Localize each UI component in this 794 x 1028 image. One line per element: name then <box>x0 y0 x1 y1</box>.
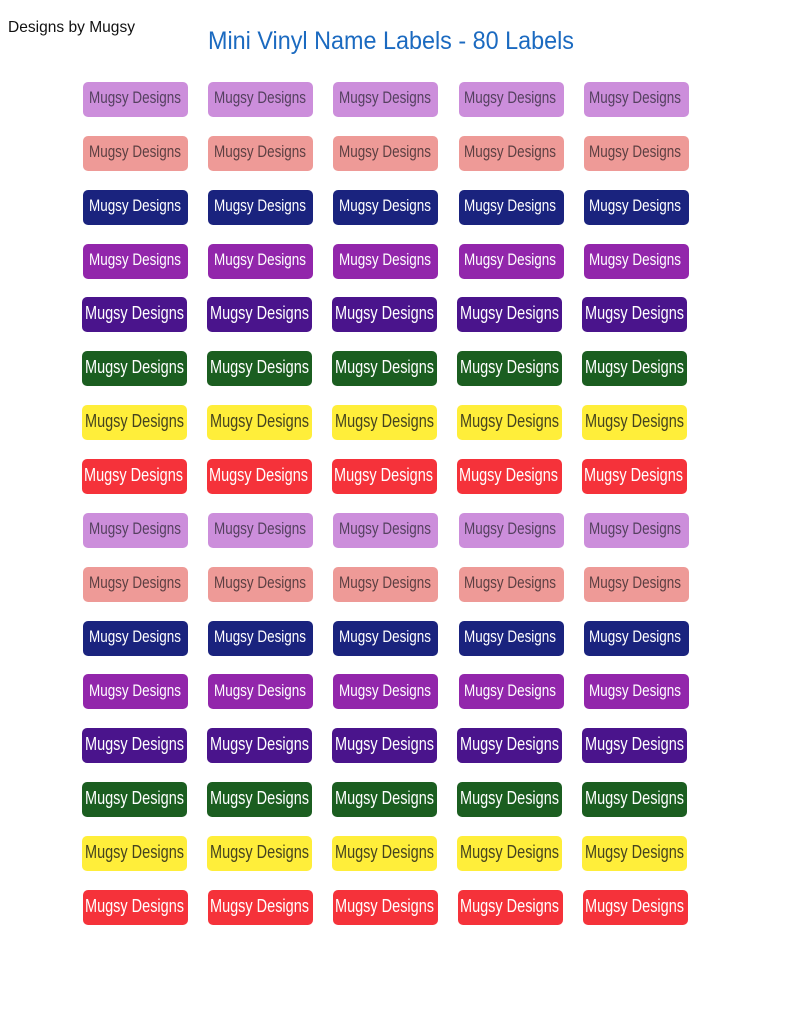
row 12: purple labels: Mugsy Designs <box>339 681 431 700</box>
row 5: indigo labels: Mugsy Designs <box>585 303 684 323</box>
row 12: purple labels: Mugsy Designs <box>464 681 556 700</box>
row 1: lavender labels: Mugsy Designs <box>89 88 181 107</box>
row 5: indigo labels <box>82 297 687 332</box>
row 15: yellow labels: Mugsy Designs <box>585 842 684 862</box>
row 8: red labels: Mugsy Designs <box>334 465 433 485</box>
row 15: yellow labels: Mugsy Designs <box>85 842 184 862</box>
row 14: green labels: Mugsy Designs <box>585 788 684 808</box>
row 7: yellow labels: Mugsy Designs <box>85 411 184 431</box>
row 2: pink labels <box>83 136 689 171</box>
row 9: lavender labels: Mugsy Designs <box>214 519 306 538</box>
row 15: yellow labels: Mugsy Designs <box>335 842 434 862</box>
label grid <box>82 82 689 925</box>
row 3: navy labels: Mugsy Designs <box>214 196 306 215</box>
row 9: lavender labels: Mugsy Designs <box>464 519 556 538</box>
row 6: green labels: Mugsy Designs <box>210 357 309 377</box>
row 16: red labels <box>83 890 688 925</box>
row 15: yellow labels: Mugsy Designs <box>460 842 559 862</box>
row 4: purple labels: Mugsy Designs <box>339 250 431 269</box>
row 11: navy labels: Mugsy Designs <box>464 627 556 646</box>
row 7: yellow labels: Mugsy Designs <box>210 411 309 431</box>
row 6: green labels: Mugsy Designs <box>460 357 559 377</box>
row 6: green labels: Mugsy Designs <box>85 357 184 377</box>
row 2: pink labels: Mugsy Designs <box>214 142 306 161</box>
row 4: purple labels: Mugsy Designs <box>589 250 681 269</box>
row 10: pink labels: Mugsy Designs <box>89 573 181 592</box>
row 14: green labels: Mugsy Designs <box>460 788 559 808</box>
row 10: pink labels: Mugsy Designs <box>214 573 306 592</box>
row 10: pink labels <box>83 567 689 602</box>
row 16: red labels: Mugsy Designs <box>460 896 559 916</box>
row 6: green labels: Mugsy Designs <box>585 357 684 377</box>
row 11: navy labels: Mugsy Designs <box>589 627 681 646</box>
row 14: green labels: Mugsy Designs <box>335 788 434 808</box>
row 3: navy labels: Mugsy Designs <box>589 196 681 215</box>
row 7: yellow labels: Mugsy Designs <box>585 411 684 431</box>
row 5: indigo labels: Mugsy Designs <box>335 303 434 323</box>
row 1: lavender labels: Mugsy Designs <box>589 88 681 107</box>
row 4: purple labels: Mugsy Designs <box>214 250 306 269</box>
row 12: purple labels <box>83 674 689 709</box>
row 11: navy labels: Mugsy Designs <box>339 627 431 646</box>
row 5: indigo labels: Mugsy Designs <box>210 303 309 323</box>
row 11: navy labels: Mugsy Designs <box>89 627 181 646</box>
row 3: navy labels <box>83 190 689 225</box>
row 13: indigo labels: Mugsy Designs <box>210 734 309 754</box>
row 11: navy labels: Mugsy Designs <box>214 627 306 646</box>
row 11: navy labels <box>83 621 689 656</box>
row 2: pink labels: Mugsy Designs <box>464 142 556 161</box>
row 8: red labels: Mugsy Designs <box>584 465 683 485</box>
row 14: green labels: Mugsy Designs <box>85 788 184 808</box>
row 14: green labels <box>82 782 687 817</box>
row 15: yellow labels: Mugsy Designs <box>210 842 309 862</box>
brand name: Designs by Mugsy <box>8 19 135 36</box>
row 4: purple labels: Mugsy Designs <box>464 250 556 269</box>
row 7: yellow labels: Mugsy Designs <box>335 411 434 431</box>
row 1: lavender labels: Mugsy Designs <box>339 88 431 107</box>
row 6: green labels: Mugsy Designs <box>335 357 434 377</box>
row 7: yellow labels: Mugsy Designs <box>460 411 559 431</box>
row 9: lavender labels: Mugsy Designs <box>589 519 681 538</box>
row 7: yellow labels <box>82 405 687 440</box>
title: Mini Vinyl Name Labels - 80 Labels <box>208 27 574 55</box>
row 14: green labels: Mugsy Designs <box>210 788 309 808</box>
row 4: purple labels <box>83 244 689 279</box>
row 16: red labels: Mugsy Designs <box>210 896 309 916</box>
row 8: red labels: Mugsy Designs <box>459 465 558 485</box>
row 8: red labels: Mugsy Designs <box>209 465 308 485</box>
row 5: indigo labels: Mugsy Designs <box>85 303 184 323</box>
row 13: indigo labels <box>82 728 687 763</box>
row 1: lavender labels: Mugsy Designs <box>214 88 306 107</box>
row 8: red labels <box>82 459 687 494</box>
row 5: indigo labels: Mugsy Designs <box>460 303 559 323</box>
row 2: pink labels: Mugsy Designs <box>339 142 431 161</box>
row 13: indigo labels: Mugsy Designs <box>335 734 434 754</box>
row 16: red labels: Mugsy Designs <box>85 896 184 916</box>
row 3: navy labels: Mugsy Designs <box>89 196 181 215</box>
row 3: navy labels: Mugsy Designs <box>464 196 556 215</box>
row 3: navy labels: Mugsy Designs <box>339 196 431 215</box>
row 1: lavender labels <box>83 82 689 117</box>
row 2: pink labels: Mugsy Designs <box>589 142 681 161</box>
row 12: purple labels: Mugsy Designs <box>589 681 681 700</box>
row 12: purple labels: Mugsy Designs <box>214 681 306 700</box>
row 10: pink labels: Mugsy Designs <box>589 573 681 592</box>
row 13: indigo labels: Mugsy Designs <box>585 734 684 754</box>
row 10: pink labels: Mugsy Designs <box>339 573 431 592</box>
row 6: green labels <box>82 351 687 386</box>
row 9: lavender labels: Mugsy Designs <box>339 519 431 538</box>
row 2: pink labels: Mugsy Designs <box>89 142 181 161</box>
row 13: indigo labels: Mugsy Designs <box>460 734 559 754</box>
row 8: red labels: Mugsy Designs <box>84 465 183 485</box>
row 4: purple labels: Mugsy Designs <box>89 250 181 269</box>
row 1: lavender labels: Mugsy Designs <box>464 88 556 107</box>
row 9: lavender labels: Mugsy Designs <box>89 519 181 538</box>
row 13: indigo labels: Mugsy Designs <box>85 734 184 754</box>
row 16: red labels: Mugsy Designs <box>585 896 684 916</box>
row 12: purple labels: Mugsy Designs <box>89 681 181 700</box>
row 16: red labels: Mugsy Designs <box>335 896 434 916</box>
row 15: yellow labels <box>82 836 687 871</box>
row 10: pink labels: Mugsy Designs <box>464 573 556 592</box>
row 9: lavender labels <box>83 513 689 548</box>
